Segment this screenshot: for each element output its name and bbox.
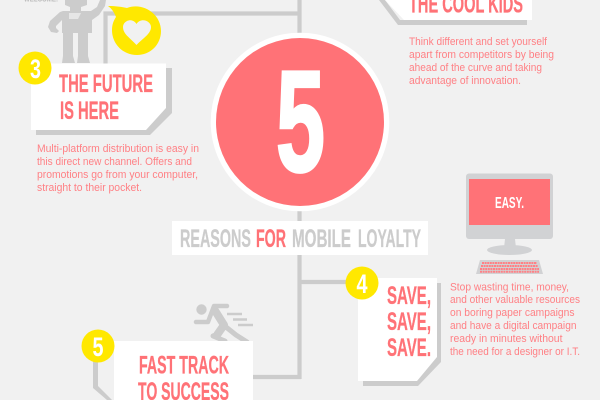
heading: save save save: SAVE. [387,334,431,362]
text: think different [409,36,554,87]
text: multi-platform distribution [37,143,199,194]
banner: reasons for mobile loyalty: MOBILE [292,225,351,253]
badge: number 5: 5 [92,332,104,362]
badge: number 3 [18,52,52,84]
heading: save save save: SAVE, [387,308,431,336]
panel: fast track to success [93,341,253,400]
heading: fast track to success [138,352,229,400]
text: multi-platform distribution: straight to their pocket. [37,182,142,194]
banner: reasons for mobile loyalty [172,221,428,255]
heading: the future is here: IS HERE [60,97,119,125]
icon: robot [24,0,106,63]
text: stop wasting time: and have a digital campaign [450,320,576,332]
heading: save save save [387,282,431,362]
text: multi-platform distribution: promotions go from your computer, [37,169,198,181]
connector lines [106,0,350,379]
text: stop wasting time: Stop wasting time, money, [450,282,569,294]
text: stop wasting time: on boring paper campaigns [450,307,575,319]
icon: desktop computer: EASY. [495,195,524,212]
text: stop wasting time: the need for a designer or I.T. [450,346,580,358]
text: stop wasting time: ready in minutes without [450,333,563,345]
icon: running person [196,304,253,342]
heading: the future is here: THE FUTURE [59,70,153,98]
central circle with number 5 [211,33,389,211]
panel: the cool kids [379,0,532,25]
text: think different: ahead of the curve and taking [409,62,542,74]
badge: number 5 [82,330,114,362]
icon: heart speech bubble [108,6,161,55]
text: think different: apart from competitors by being [409,49,554,61]
text: think different: Think different and set yourself [409,36,548,48]
banner: reasons for mobile loyalty: LOYALTY [358,225,421,253]
text: multi-platform distribution: Multi-platform distribution is easy in [37,143,199,155]
icon: desktop computer [466,174,553,274]
badge: number 3: 3 [30,54,41,84]
panel: the future is here [31,64,172,135]
banner: reasons for mobile loyalty: REASONS [180,225,251,253]
text: stop wasting time [450,282,580,358]
central circle with number 5: 5 [276,41,325,202]
text: think different: advantage of innovation. [409,75,521,87]
panel: save save save [358,278,441,386]
banner: reasons for mobile loyalty: FOR [256,225,286,253]
heading: save save save: SAVE, [387,282,431,310]
text: multi-platform distribution: this direct new channel. Offers and [37,156,192,168]
heading: fast track to success: FAST TRACK [139,352,229,380]
text: stop wasting time: and other valuable resources [450,294,580,306]
heading: the future is here [59,70,153,125]
badge: number 4 [346,266,378,300]
badge: number 4: 4 [356,269,368,299]
